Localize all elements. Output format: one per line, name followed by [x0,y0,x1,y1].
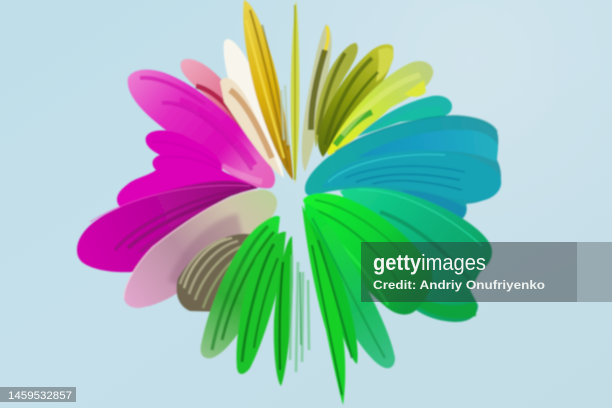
petals: teal and blue discs [305,96,501,219]
petals: sea-green discs [340,188,492,322]
cluster: olive ridged discs [176,234,250,312]
abstract flower of coloured discs [77,0,501,405]
petals: bright green discs [302,193,433,405]
watermark: getty images credit band [361,242,612,302]
petal: cream disc [124,190,277,308]
petals: olive discs [302,24,393,172]
petal: rose back disc [181,59,256,140]
petals: lower-left green discs [201,216,309,386]
watermark credit text: Credit: Andriy Onufriyenko [373,280,545,292]
petal: central yellow sliver [281,0,299,184]
petal: lime disc [327,61,433,155]
watermark logo text: gettyimages [373,250,486,275]
image id label: 1459532857 [8,390,72,402]
petal: big magenta disc [77,181,258,272]
petals: white and gold discs at top [220,0,293,180]
petal: upper magenta disc [128,70,275,188]
image id label [0,387,76,402]
petal: middle magenta folds [117,130,258,215]
